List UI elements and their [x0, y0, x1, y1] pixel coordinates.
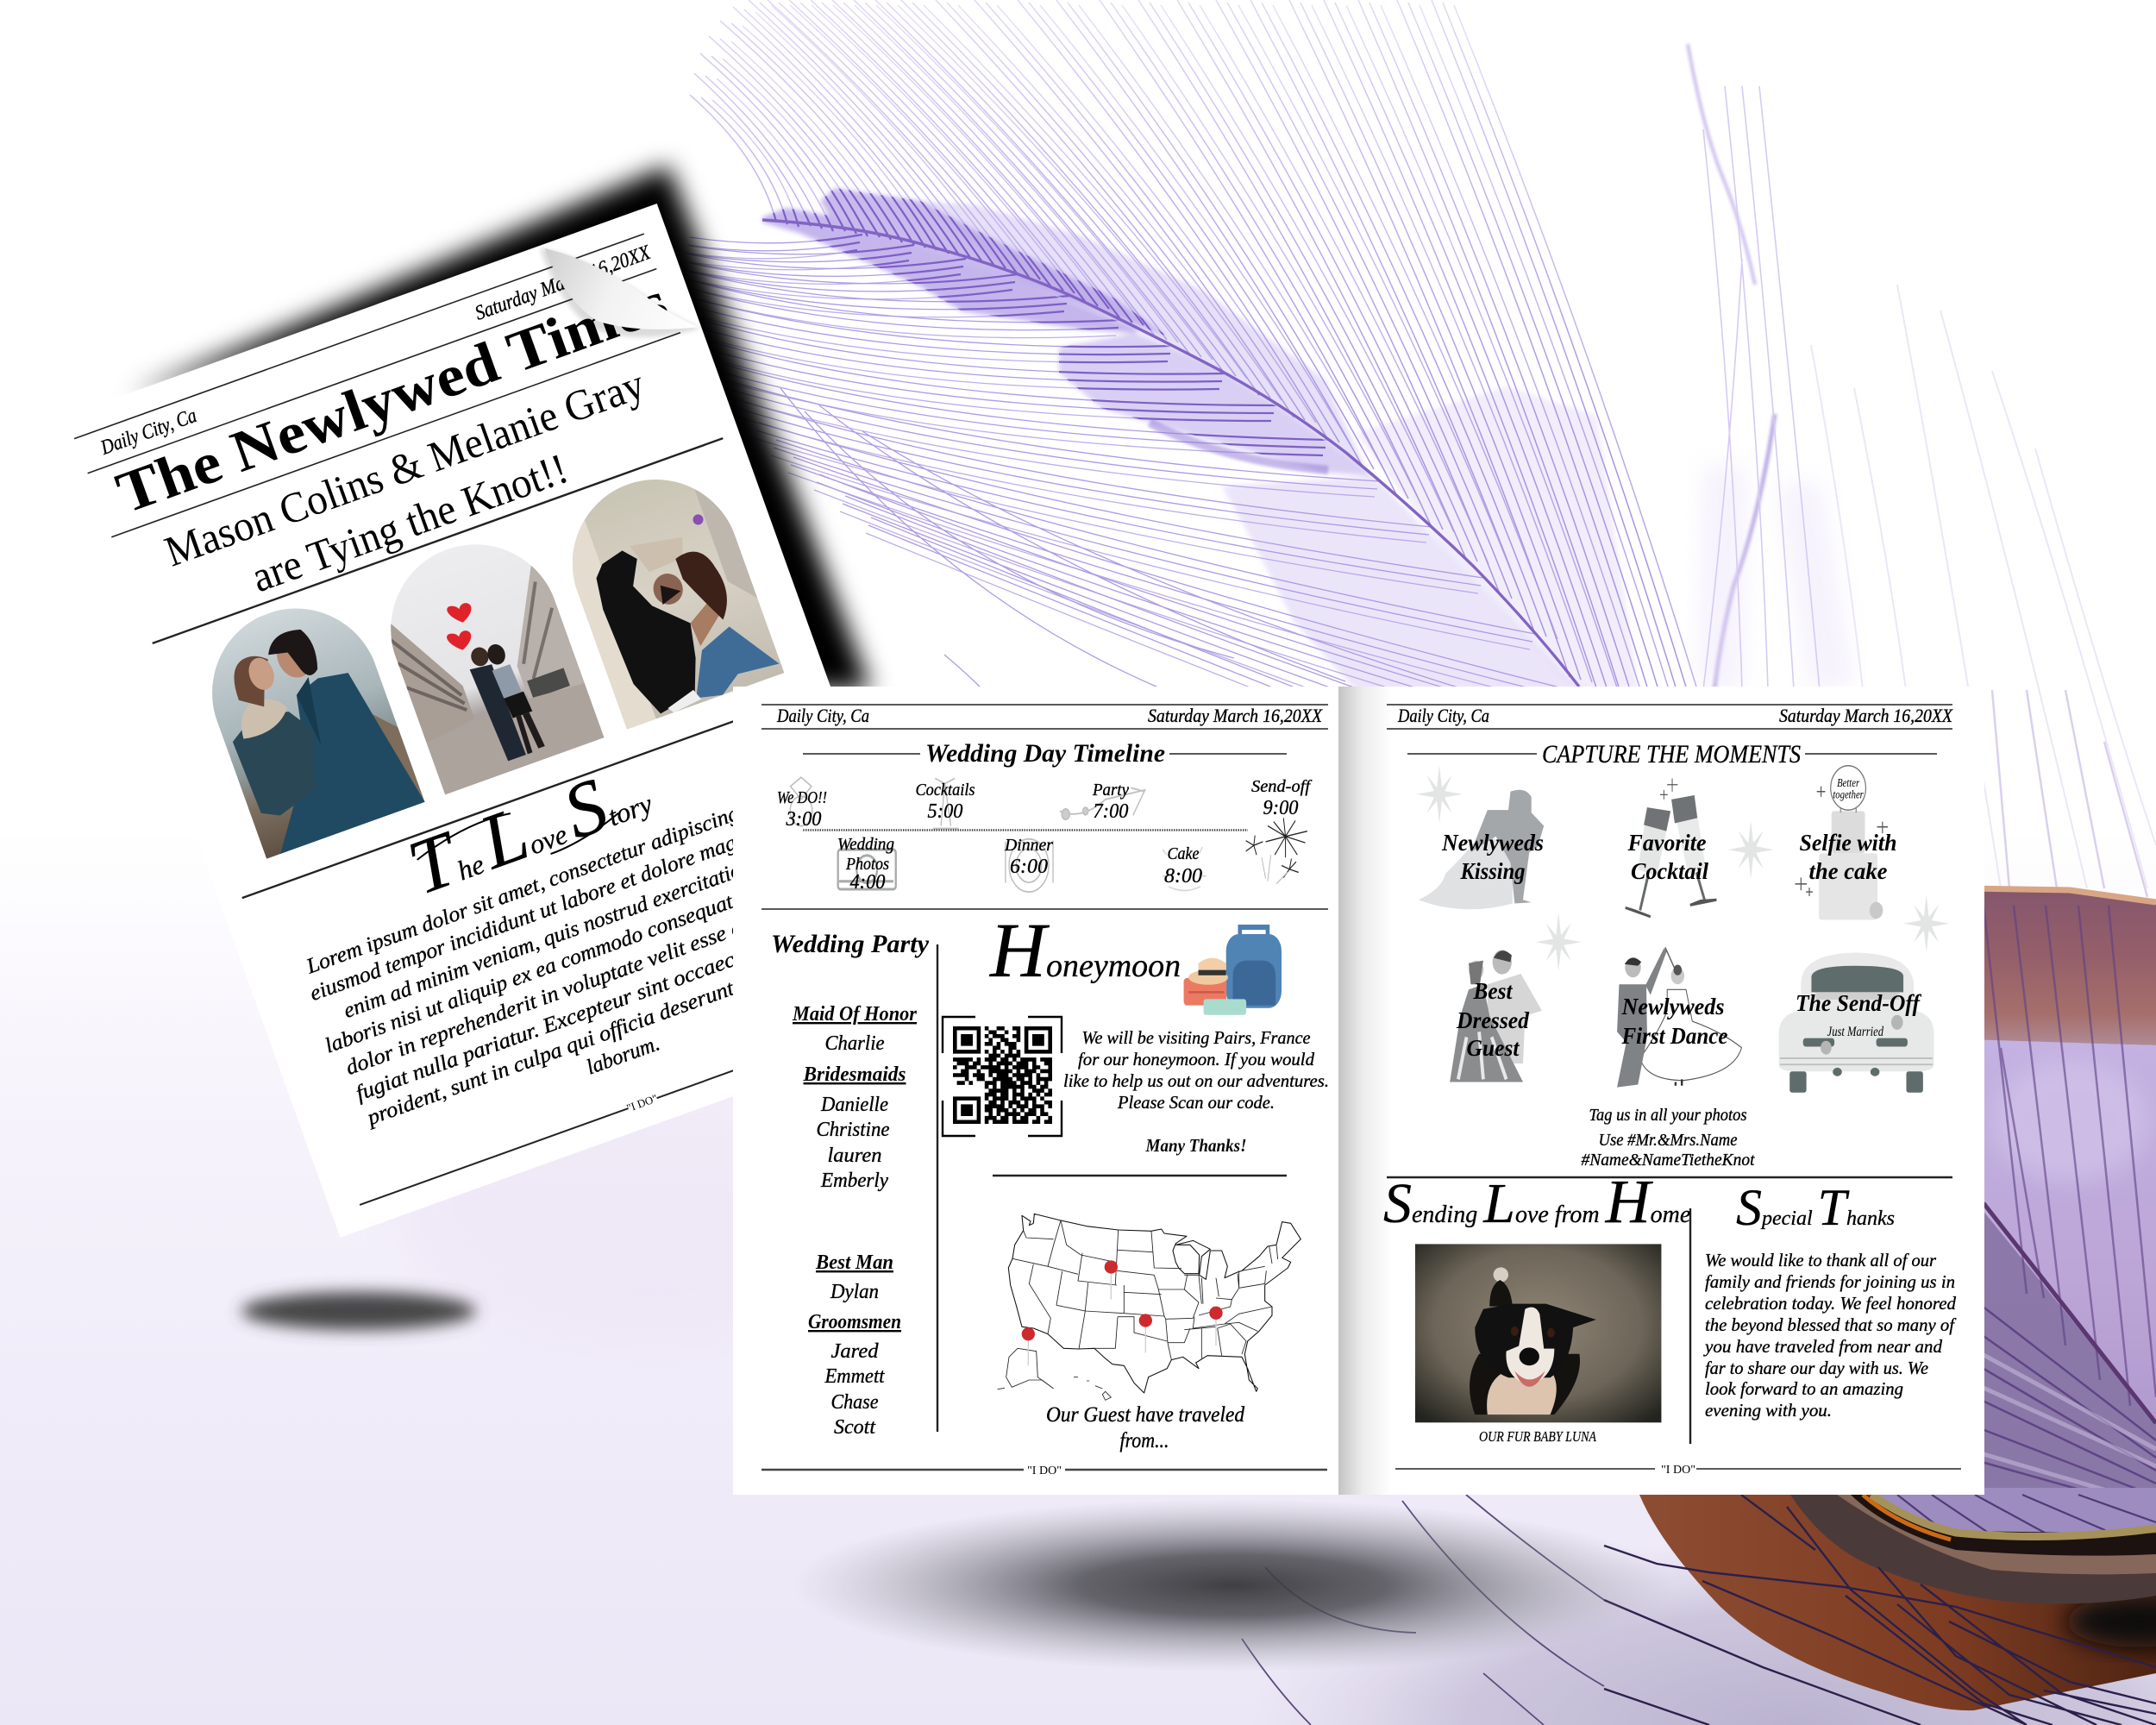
- wedding party list: Emberly: [820, 1170, 888, 1192]
- love story paragraph: eiusmod tempor incididunt ut labore et dolore magna aliqua. Ut: [307, 791, 851, 1006]
- feather barbs: [690, 0, 1747, 859]
- timeline labels: 6:00: [1010, 856, 1048, 878]
- timeline labels: Wedding: [837, 835, 894, 854]
- wedding party list: lauren: [828, 1145, 881, 1167]
- photo prompt labels: Selfie with: [1799, 830, 1897, 856]
- feather quill: [1984, 1203, 2156, 1423]
- cover page drop shadow: [129, 166, 871, 690]
- lavender feather zone: [1966, 1039, 2156, 1544]
- script heading: special thanks: Special Thanks: [1736, 1179, 1895, 1236]
- script heading: honeymoon: Honeymoon: [989, 908, 1181, 994]
- love story paragraph: laboris nisi ut aliquip ex ea commodo consequat. Duis aute irure: [322, 841, 874, 1058]
- photo prompt labels: Cocktail: [1631, 858, 1708, 884]
- panel: inner spread: [733, 687, 1984, 1495]
- bowl bands: [1837, 1495, 2156, 1575]
- love story paragraph: Lorem ipsum dolor sit amet, consectetur adipiscing elit, sed do: [303, 767, 839, 979]
- icon: best dressed couple: [1450, 950, 1542, 1082]
- right dateline: [1397, 705, 1953, 726]
- arch photo: street with red balloons: [391, 544, 604, 795]
- hashtag note: #Name&NameTietheKnot: [1582, 1151, 1755, 1170]
- photo prompt labels: the cake: [1809, 858, 1888, 884]
- love story paragraph: laborum.: [584, 1032, 663, 1080]
- thanks paragraph: far to share our day with us. We: [1705, 1358, 1928, 1378]
- thanks paragraph: celebration today. We feel honored: [1705, 1293, 1956, 1314]
- Alaska and Hawaii: [998, 1348, 1111, 1400]
- photo prompt labels: Newlyweds: [1621, 994, 1725, 1019]
- spread sheet: [733, 687, 1984, 1495]
- page sheet: [47, 204, 950, 1238]
- feather washes: [762, 188, 1639, 690]
- thanks paragraph: you have traveled from near and: [1703, 1336, 1942, 1357]
- wedding party list: Jared: [831, 1340, 880, 1363]
- dateline right: Saturday March 16,20XX: [472, 242, 655, 325]
- hashtag note: [1582, 1106, 1755, 1170]
- photo prompt labels: First Dance: [1621, 1023, 1728, 1049]
- bowl rim band: [1966, 890, 2156, 1045]
- honeymoon message: We will be visiting Pairs, France: [1081, 1027, 1311, 1048]
- icon: diamond ring: [790, 777, 812, 826]
- right dateline: Daily City, Ca: [1397, 705, 1489, 726]
- photo prompt labels: Guest: [1466, 1035, 1520, 1061]
- QR code: [943, 1017, 1062, 1136]
- love story paragraph: proident, sunt in culpa qui officia deserunt mollit anim id est: [362, 921, 893, 1131]
- dark striped barbs near the feather tip: [773, 188, 1326, 457]
- dark barbs on table: [1242, 1495, 2156, 1725]
- photo prompts illustrations: [1416, 765, 1949, 1093]
- wedding party list: [792, 1003, 918, 1439]
- page curl: [540, 205, 701, 370]
- photo: dog: [1415, 1244, 1661, 1422]
- state lines: [1012, 1220, 1278, 1360]
- timeline labels: 4:00: [850, 871, 885, 894]
- panel: rotated newspaper cover: [74, 204, 830, 1238]
- heading: wedding party: Wedding Party: [771, 930, 930, 958]
- icon: kissing couple: [1419, 790, 1544, 909]
- thanks paragraph: [1703, 1250, 1957, 1421]
- honeymoon message: Please Scan our code.: [1117, 1092, 1275, 1113]
- newspaper title: The Newlywed Times: [108, 268, 675, 526]
- wedding party list: Danielle: [820, 1094, 888, 1116]
- timeline labels: 3:00: [786, 808, 821, 831]
- dotted timeline: [803, 828, 1248, 831]
- icon: send-off car: Just Married: [1827, 1025, 1884, 1040]
- floating shadow small: [241, 1292, 476, 1330]
- dateline left: Daily City, Ca: [97, 405, 200, 460]
- right footer: "I DO": [1661, 1464, 1695, 1477]
- map caption: [1046, 1403, 1244, 1452]
- masthead rules: [74, 232, 814, 899]
- gold rim: [1871, 1495, 2156, 1536]
- thanks paragraph: We would like to thank all of our: [1705, 1250, 1937, 1270]
- left dateline: Daily City, Ca: [776, 705, 869, 726]
- wedding party list: Groomsmen: [808, 1311, 901, 1333]
- photo prompt labels: Favorite: [1627, 830, 1707, 856]
- timeline labels: 5:00: [928, 800, 962, 823]
- script heading: the love story: The Love Story: [398, 747, 661, 912]
- hashtag note: Tag us in all your photos: [1589, 1106, 1747, 1125]
- thanks paragraph: look forward to an amazing: [1705, 1378, 1903, 1399]
- photo prompt labels: [1441, 830, 1922, 1061]
- map pins: [1022, 1260, 1223, 1365]
- map caption: from...: [1119, 1429, 1169, 1452]
- icon: champagne flutes: [1626, 778, 1716, 917]
- icon: luggage: [1184, 927, 1282, 1015]
- icon: cake sparkles: [1163, 847, 1206, 891]
- timeline labels: Send-off: [1251, 777, 1312, 796]
- heading: wedding day timeline: Wedding Day Timeline: [925, 739, 1165, 768]
- left footer: "I DO": [1027, 1465, 1062, 1477]
- honeymoon message: for our honeymoon. If you would: [1078, 1049, 1314, 1070]
- icon: music notes: [1060, 787, 1145, 819]
- chart: guest map of the USA with pins: [998, 1214, 1300, 1400]
- thanks paragraph: the beyond blessed that so many of: [1705, 1314, 1957, 1335]
- red hearts: [447, 603, 471, 623]
- timeline labels: Photos: [845, 855, 889, 874]
- floating shadow large: [793, 1499, 1673, 1672]
- centre fold shadow: [1338, 687, 1392, 1495]
- cover footer: "I DO": [625, 1091, 659, 1114]
- timeline labels: We DO!!: [777, 788, 827, 807]
- wedding party list: Emmett: [824, 1365, 886, 1388]
- left dateline: Saturday March 16,20XX: [1148, 705, 1323, 726]
- love story paragraph: [295, 764, 911, 1160]
- icon: cocktail glasses: [933, 778, 959, 829]
- main purple feather: [686, 0, 1697, 687]
- wedding party list: Dylan: [830, 1281, 879, 1303]
- copper bowl and feather at right: [1242, 888, 2156, 1725]
- timeline labels: Dinner: [1004, 836, 1053, 855]
- timeline labels: 8:00: [1164, 865, 1202, 888]
- love story paragraph: enim ad minim veniam, quis nostrud exercitation ullamco: [341, 829, 827, 1023]
- sparkles: [1416, 765, 1949, 971]
- arch photo: seaside couple: [212, 609, 424, 859]
- timeline labels: Cocktails: [916, 781, 975, 800]
- bowl body: [1639, 1495, 2156, 1710]
- timeline labels: 7:00: [1094, 800, 1128, 823]
- couple names: Mason Colins & Melanie Gray: [159, 360, 650, 575]
- icon: camera: [838, 850, 896, 889]
- timeline labels: Party: [1092, 781, 1129, 800]
- honeymoon message: like to help us out on our adventures.: [1063, 1070, 1329, 1091]
- second faint feather: [1688, 44, 2156, 897]
- lavender above rim: [1871, 1488, 2156, 1536]
- map caption: Our Guest have traveled: [1046, 1403, 1244, 1427]
- heading: capture the moments: CAPTURE THE MOMENTS: [1542, 740, 1801, 768]
- photo prompt labels: Kissing: [1460, 858, 1525, 884]
- script heading: sending love from home: Sending Love from Home: [1383, 1167, 1690, 1236]
- hashtag note: Use #Mr.&Mrs.Name: [1599, 1131, 1738, 1150]
- timeline labels: [777, 777, 1312, 894]
- photo prompt labels: The Send-Off: [1796, 990, 1922, 1016]
- wedding party list: Chase: [831, 1391, 879, 1414]
- timeline icons: [790, 777, 1307, 892]
- wedding party list: Bridesmaids: [803, 1063, 906, 1086]
- photo prompt labels: Best: [1473, 978, 1514, 1004]
- honeymoon message: [1063, 1027, 1329, 1156]
- wedding party list: Maid Of Honor: [792, 1003, 918, 1026]
- icon: cake: [1796, 766, 1888, 920]
- thanks paragraph: family and friends for joining us in: [1705, 1271, 1955, 1292]
- icon: cake: together: [1833, 788, 1864, 801]
- love story paragraph: fugiat nulla pariatur. Excepteur sint occaecat cupidatat non: [353, 897, 881, 1106]
- timeline labels: 9:00: [1263, 797, 1299, 819]
- timeline labels: Cake: [1168, 844, 1200, 863]
- thanks paragraph: evening with you.: [1705, 1400, 1832, 1421]
- honeymoon message: Many Thanks!: [1145, 1135, 1247, 1156]
- photo caption: OUR FUR BABY LUNA: [1479, 1428, 1597, 1445]
- wedding party list: Charlie: [824, 1032, 885, 1055]
- wedding party list: Scott: [834, 1416, 876, 1439]
- left page: rules: [761, 705, 1328, 1470]
- photo prompt labels: Newlyweds: [1441, 830, 1544, 856]
- icon: cake: Better: [1837, 776, 1859, 790]
- love story paragraph: dolor in reprehenderit in voluptate velit esse cillum dolore eu: [342, 869, 874, 1080]
- cover footer: [357, 997, 923, 1211]
- wedding party list: Christine: [816, 1119, 890, 1141]
- icon: fireworks: [1246, 818, 1307, 884]
- wedding party list: Best Man: [815, 1251, 893, 1274]
- right page: rules: [1387, 705, 1961, 1469]
- tying the knot: are Tying the Knot!!: [245, 443, 574, 601]
- icon: send-off car: [1779, 952, 1934, 1093]
- arch photo: couple kissing on steps: [573, 480, 785, 730]
- icon: dinner plate: [1006, 839, 1053, 892]
- photo prompt labels: Dressed: [1456, 1007, 1529, 1033]
- icon: first dance couple: [1617, 947, 1741, 1088]
- right dateline: Saturday March 16,20XX: [1779, 705, 1953, 726]
- left dateline: [776, 705, 1323, 726]
- feather shaft: [762, 220, 1579, 687]
- map outline: [1008, 1214, 1300, 1393]
